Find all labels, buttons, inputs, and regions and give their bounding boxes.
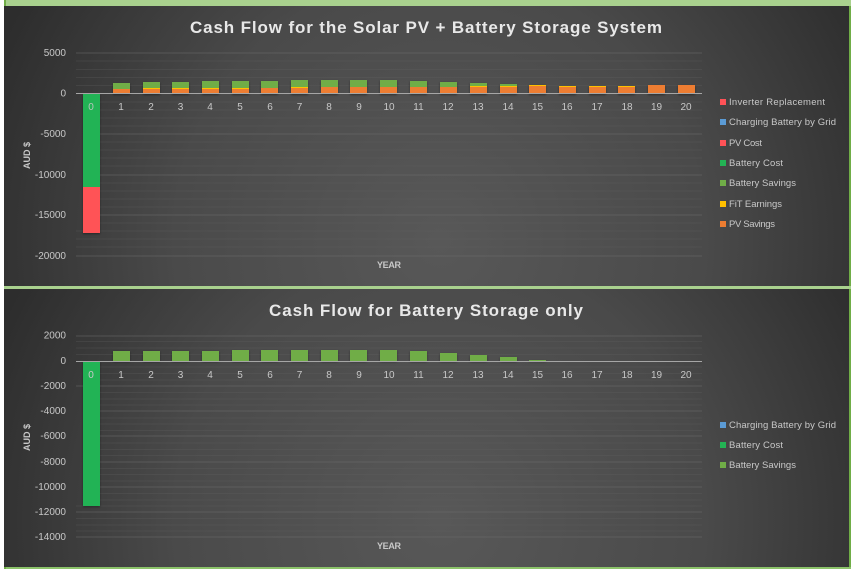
x axis labels: 12 [442, 370, 454, 381]
y axis labels: -14000 [35, 532, 66, 543]
x axis labels: 19 [651, 102, 662, 113]
legend: Battery Savings [729, 178, 796, 189]
x axis labels: 12 [442, 102, 454, 113]
x axis labels: 6 [267, 370, 273, 381]
panel: battery storage chart [4, 289, 849, 567]
y axis labels: -6000 [40, 431, 66, 442]
y axis labels: -2000 [40, 381, 66, 392]
y axis labels [35, 330, 66, 543]
x axis labels: 8 [326, 370, 332, 381]
legend: PV Cost [729, 138, 762, 149]
x axis labels: 2 [148, 370, 154, 381]
x axis labels: 11 [413, 370, 424, 381]
x axis labels [88, 102, 692, 113]
y axis labels: -8000 [40, 457, 66, 468]
x axis labels: 2 [148, 102, 154, 113]
y axis labels: 5000 [44, 48, 66, 59]
legend: Battery Savings [729, 460, 796, 471]
x axis labels: 14 [502, 370, 514, 381]
x axis labels: 4 [207, 370, 213, 381]
x axis labels: 8 [326, 102, 332, 113]
x axis labels: 1 [118, 370, 124, 381]
y axis labels [35, 48, 66, 262]
y axis title: AUD $ [22, 142, 32, 169]
stacked bars [83, 80, 695, 233]
y axis labels: -10000 [35, 482, 66, 493]
x axis title: YEAR [377, 541, 402, 551]
x axis labels: 10 [383, 370, 395, 381]
x axis labels: 10 [383, 102, 395, 113]
x axis labels: 1 [118, 102, 124, 113]
x axis labels: 3 [178, 102, 184, 113]
x axis labels: 14 [502, 102, 514, 113]
x axis title: YEAR [377, 260, 402, 270]
bar: year 0 [83, 94, 100, 233]
x axis labels: 0 [88, 370, 94, 381]
x axis labels: 7 [297, 370, 303, 381]
y axis labels: -5000 [40, 129, 66, 140]
y axis labels: -4000 [40, 406, 66, 417]
x axis labels: 3 [178, 370, 184, 381]
x axis labels: 16 [561, 370, 573, 381]
legend [720, 97, 836, 230]
x axis labels: 19 [651, 370, 662, 381]
bar: year 0 [83, 361, 100, 506]
x axis labels: 13 [472, 370, 484, 381]
legend: Battery Cost [729, 158, 783, 169]
x axis labels: 5 [237, 370, 243, 381]
x axis labels: 15 [532, 102, 543, 113]
x axis labels: 15 [532, 370, 543, 381]
title: solar PV + battery: Cash Flow for the Solar PV + Battery Storage System [190, 18, 662, 37]
legend: FiT Earnings [729, 199, 782, 210]
legend: Inverter Replacement [729, 97, 825, 108]
y axis labels: 0 [60, 88, 66, 100]
y axis labels: 2000 [44, 330, 66, 342]
x axis labels: 18 [621, 102, 633, 113]
zero axis line [76, 360, 702, 362]
x axis labels: 5 [237, 102, 243, 113]
legend: PV Savings [729, 219, 775, 230]
x axis labels: 0 [88, 102, 94, 113]
bars: years 1 to 20 [113, 80, 695, 94]
x axis labels: 9 [356, 102, 362, 113]
gridlines [76, 53, 702, 256]
x axis labels: 20 [680, 102, 692, 113]
y axis title: AUD $ [22, 424, 32, 451]
y axis labels: 0 [60, 356, 66, 367]
legend: Battery Cost [729, 440, 783, 451]
legend [720, 420, 836, 471]
y axis labels: -12000 [35, 507, 66, 518]
x axis labels: 18 [621, 370, 633, 381]
x axis labels: 11 [413, 102, 424, 113]
x axis labels: 4 [207, 102, 213, 113]
legend: Charging Battery by Grid [729, 420, 836, 431]
y axis labels: -15000 [35, 210, 66, 221]
x axis labels: 16 [561, 102, 573, 113]
title: battery storage: Cash Flow for Battery Storage only [269, 301, 584, 320]
x axis labels: 9 [356, 370, 362, 381]
zero axis line [76, 92, 702, 94]
x axis labels: 20 [680, 370, 692, 381]
panel: solar PV + battery chart [4, 6, 849, 286]
x axis labels: 17 [591, 370, 603, 381]
x axis labels: 6 [267, 102, 273, 113]
legend: Charging Battery by Grid [729, 117, 836, 128]
bars: years 1 to 15 [113, 350, 546, 361]
bars [83, 350, 546, 506]
y axis labels: -10000 [35, 170, 66, 181]
x axis labels: 13 [472, 102, 484, 113]
gridlines [76, 336, 702, 537]
y axis labels: -20000 [35, 251, 66, 262]
x axis labels: 7 [297, 102, 303, 113]
x axis labels [88, 370, 692, 381]
divider between panels [4, 286, 851, 289]
x axis labels: 17 [591, 102, 603, 113]
